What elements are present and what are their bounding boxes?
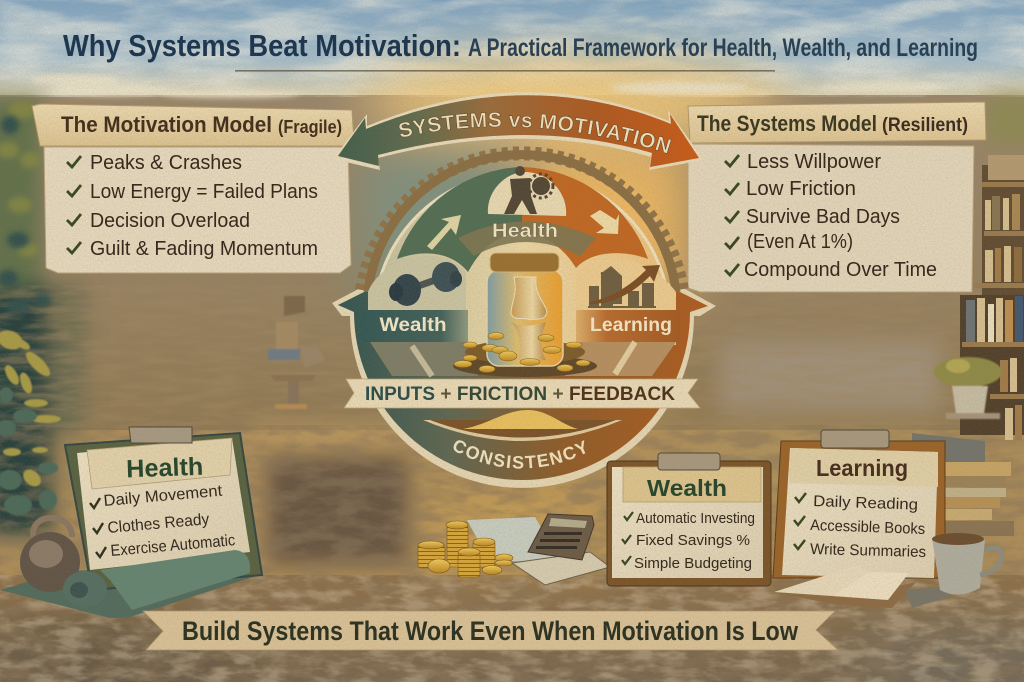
paper check (467, 517, 560, 562)
clipboard: health: Clothes Ready (107, 511, 210, 537)
icon: dumbbell (389, 262, 462, 306)
clipboard: health: Daily Movement (103, 483, 223, 510)
mat roll (100, 550, 250, 610)
banner: inputs friction feedback (344, 379, 700, 408)
heading: The Systems Model (697, 111, 877, 136)
gear ring (362, 153, 682, 345)
checklist (725, 151, 937, 281)
clipboard: wealth: Automatic Investing (636, 511, 755, 527)
clip (129, 427, 192, 443)
checklist (67, 152, 318, 260)
clipboard: learning: Learning (816, 455, 908, 481)
clip (821, 430, 889, 448)
clipboard: learning (773, 430, 945, 578)
banner: inputs friction feedback: INPUTS + FRICTION + FEEDBACK (365, 384, 675, 405)
clouds (30, 74, 940, 98)
checklist: Low Friction (746, 178, 856, 200)
stacked books (912, 433, 1014, 536)
heading: The Motivation Model (61, 112, 272, 137)
icon: calculator (528, 514, 594, 560)
potted plant (934, 357, 1002, 419)
bookshelf (960, 155, 1024, 440)
health node (427, 166, 619, 256)
clipboard: wealth: Simple Budgeting (634, 556, 752, 572)
learning node: Learning (590, 315, 672, 336)
checklist: (Even At 1%) (747, 231, 853, 253)
checklist: Less Willpower (747, 151, 881, 173)
checklist: Low Energy = Failed Plans (90, 181, 318, 203)
learning node (576, 258, 680, 345)
board (65, 433, 262, 590)
closing banner: Build Systems That Work Even When Motivation Is Low (182, 616, 799, 646)
lower inner panels (370, 342, 676, 376)
clipboard: learning: Write Summaries (810, 541, 927, 561)
lower ring with side arrowheads (332, 277, 716, 488)
consistency pile (423, 410, 622, 469)
yoga mat (0, 560, 262, 618)
clipboard: health (0, 427, 262, 618)
top arrow: systems vs motivation (338, 92, 699, 170)
wealth node (360, 256, 468, 345)
central framework diagram (332, 92, 716, 488)
open book (774, 565, 950, 608)
wealth node: Wealth (380, 315, 446, 336)
desk items: coins, calculator (418, 514, 610, 585)
title (63, 28, 978, 63)
clipboard: wealth (607, 453, 771, 586)
checklist: Peaks & Crashes (90, 152, 242, 174)
jar with bone and coins (453, 253, 597, 377)
clipboard: health: Health (126, 453, 204, 483)
foliage (0, 101, 61, 515)
checklist: Survive Bad Days (746, 206, 900, 228)
checklist: Compound Over Time (744, 259, 937, 281)
clip (658, 453, 720, 470)
icon: coin stacks (418, 521, 513, 577)
panel: systems model (688, 102, 986, 292)
title: Why Systems Beat Motivation: (63, 28, 461, 63)
checklist: Decision Overload (90, 210, 250, 232)
top arrow: systems vs motivation: SYSTEMS vs MOTIVATION (398, 112, 672, 154)
consistency pile: CONSISTENCY (454, 440, 586, 469)
panel: motivation model: (Fragile) (278, 117, 342, 137)
clipboard: health: Exercise Automatic (110, 532, 236, 560)
icon: person pushing gear (504, 166, 553, 214)
birdbath (268, 296, 325, 409)
panel: systems model: (Resilient) (882, 115, 968, 136)
panel: motivation model (32, 104, 354, 273)
inner green and orange arcs (397, 167, 648, 272)
icon: kettlebell (20, 518, 80, 592)
clipboard: learning: Accessible Books (810, 517, 926, 538)
notebook (512, 552, 610, 585)
clipboard: learning: Daily Reading (813, 493, 918, 514)
checklist: Guilt & Fading Momentum (90, 238, 318, 260)
clipboard: wealth: Fixed Savings % (636, 533, 750, 549)
icon: growth chart (588, 265, 660, 308)
clipboard: wealth: Wealth (647, 475, 727, 501)
health node: Health (492, 221, 558, 242)
arrows on the inner arc (427, 215, 461, 250)
closing banner (143, 611, 838, 650)
coffee cup (932, 533, 1002, 595)
